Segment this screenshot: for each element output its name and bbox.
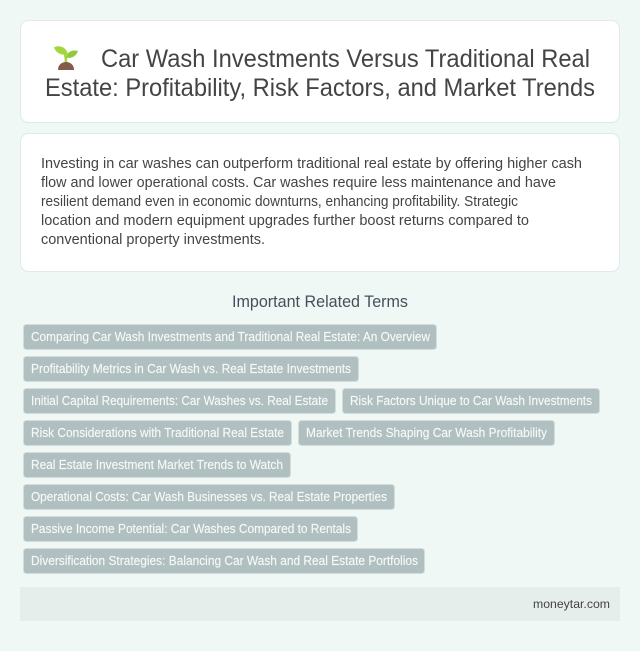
title (45, 46, 595, 102)
tag (342, 388, 600, 414)
tag: Risk Factors Unique to Car Wash Investments (350, 394, 592, 408)
footer bar (20, 587, 620, 621)
title: Estate: Profitability, Risk Factors, and Market Trends (45, 75, 595, 102)
tag: Passive Income Potential: Car Washes Compared to Rentals (31, 522, 351, 536)
summary text: Investing in car washes can outperform traditional real estate by offering higher cash (41, 156, 582, 172)
tag: Diversification Strategies: Balancing Car Wash and Real Estate Portfolios (31, 554, 418, 568)
tag (24, 356, 358, 382)
panel: related term tags (24, 324, 600, 574)
summary text: flow and lower operational costs. Car washes require less maintenance and have (41, 175, 556, 191)
panel: title card (20, 20, 620, 122)
title: Car Wash Investments Versus Traditional Real (101, 46, 590, 73)
tag (24, 388, 336, 414)
summary text: location and modern equipment upgrades further boost returns compared to (41, 213, 529, 229)
footer source: moneytar.com (533, 597, 610, 611)
tag (24, 548, 424, 574)
tag (24, 420, 292, 446)
tag: Profitability Metrics in Car Wash vs. Real Estate Investments (31, 362, 351, 376)
tag: Operational Costs: Car Wash Businesses vs. Real Estate Properties (31, 490, 387, 504)
tag: Initial Capital Requirements: Car Washes vs. Real Estate (31, 394, 328, 408)
tag: Market Trends Shaping Car Wash Profitability (306, 426, 548, 440)
panel: summary card (20, 134, 620, 272)
tag (298, 420, 554, 446)
tag (24, 324, 436, 350)
tag: Risk Considerations with Traditional Real Estate (31, 426, 284, 440)
summary text: conventional property investments. (41, 232, 265, 248)
tag: Comparing Car Wash Investments and Traditional Real Estate: An Overview (31, 330, 431, 344)
summary text (41, 156, 582, 248)
tag: Real Estate Investment Market Trends to Watch (31, 458, 283, 472)
heading: related terms: Important Related Terms (232, 293, 408, 311)
tag (24, 516, 358, 542)
icon: sprout (54, 46, 78, 70)
summary text: resilient demand even in economic downturns, enhancing profitability. Strategic (41, 194, 519, 210)
tag (24, 452, 290, 478)
tag (24, 484, 394, 510)
